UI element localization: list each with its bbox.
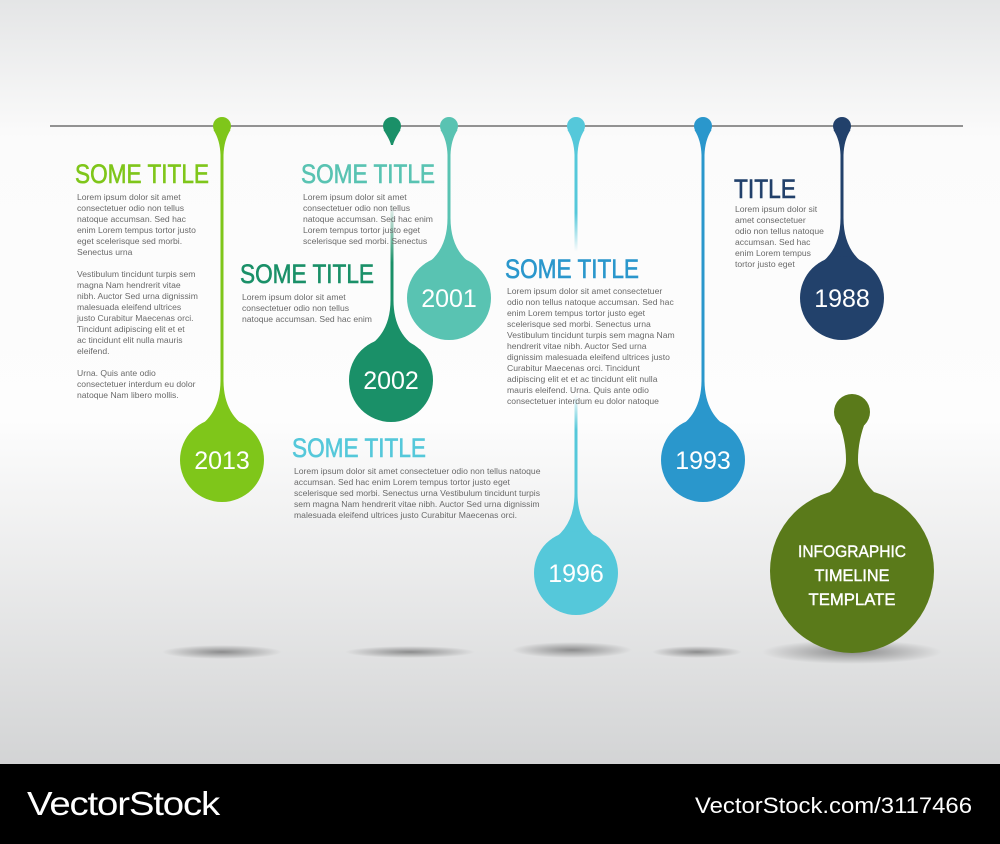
text block: 2001: Lorem tempus tortor justo eget — [303, 225, 421, 235]
shadows — [162, 640, 942, 664]
text block: 2001: SOME TITLE — [301, 159, 435, 189]
main badge: infographic timeline template: TIMELINE — [814, 566, 890, 585]
pin: 1988 — [800, 117, 884, 340]
text block: 1996: scelerisque sed morbi. Senectus urna Vestibulum tincidunt turpis — [294, 488, 540, 498]
footer bar: VectorStock.com/3117466 — [695, 793, 972, 818]
text block: 1993: Curabitur Maecenas orci. Tincidunt — [507, 363, 640, 373]
pin: 2001 — [407, 117, 491, 340]
text block: 2013: Tincidunt adipiscing elit et et — [77, 324, 185, 334]
text block: 2013: justo Curabitur Maecenas orci. — [76, 313, 194, 323]
text block: 1993 — [505, 254, 675, 406]
footer bar — [0, 764, 1000, 844]
text block: 1988: enim Lorem tempus — [735, 248, 811, 258]
text block: 1988: tortor justo eget — [735, 259, 795, 269]
text block: 1993: SOME TITLE — [505, 254, 639, 284]
text block: 1988: odio non tellus natoque — [735, 226, 824, 236]
text block: 2001 — [301, 159, 435, 246]
text block: 1993: dignissim malesuada eleifend ultrices justo — [507, 352, 670, 362]
text block: 2013: Vestibulum tincidunt turpis sem — [77, 269, 195, 279]
text block: 2001: consectetuer odio non tellus — [303, 203, 410, 213]
main badge: infographic timeline template: TEMPLATE — [808, 590, 896, 609]
text block: 1988: Lorem ipsum dolor sit — [735, 204, 818, 214]
text block: 2013: natoque accumsan. Sed hac — [77, 214, 187, 224]
text block: 2013 — [75, 159, 209, 400]
text block: 2002 — [240, 259, 374, 324]
text block: 1993: mauris eleifend. Urna. Quis ante odio — [507, 385, 649, 395]
year 1993: 1993 — [675, 447, 731, 475]
pin: 2013 — [180, 117, 264, 502]
text block: 2002: Lorem ipsum dolor sit amet — [242, 292, 346, 302]
text block: 1988 — [734, 174, 824, 269]
text block: 1996: malesuada eleifend ultrices justo Curabitur Maecenas orci. — [294, 510, 517, 520]
text block: 1996: sem magna Nam hendrerit vitae nibh. Auctor Sed urna dignissim — [294, 499, 540, 509]
text block: 2013: enim Lorem tempus tortor justo — [77, 225, 196, 235]
text block: 1993: adipiscing elit et et ac tincidunt elit nulla — [507, 374, 658, 384]
year 2002: 2002 — [363, 367, 419, 395]
text block: 2013: Lorem ipsum dolor sit amet — [77, 192, 181, 202]
text block: 2013: ac tincidunt elit nulla mauris — [77, 335, 183, 345]
pin: 1996 — [534, 117, 618, 615]
pin: 1993 — [661, 117, 745, 502]
main badge: infographic timeline template: INFOGRAPHIC — [798, 542, 906, 561]
text block: 1993: Vestibulum tincidunt turpis sem magna Nam — [507, 330, 675, 340]
text block: 1993: scelerisque sed morbi. Senectus urna — [507, 319, 651, 329]
year 1996: 1996 — [548, 560, 604, 588]
text block: 2013: nibh. Auctor Sed urna dignissim — [77, 291, 198, 301]
text block: 1993: odio non tellus natoque accumsan. Sed hac — [507, 297, 674, 307]
text block: 2013: SOME TITLE — [75, 159, 209, 189]
pin: 2002 — [349, 117, 433, 422]
text block: 1988: TITLE — [734, 174, 796, 204]
text block: 2013: eget scelerisque sed morbi. — [77, 236, 182, 246]
text block: 1993: consectetuer interdum eu dolor natoque — [507, 396, 659, 406]
text block: 1996 — [292, 433, 541, 520]
text block: 1988: amet consectetuer — [735, 215, 806, 225]
text block: 1993: enim Lorem tempus tortor justo eget — [507, 308, 646, 318]
text block: 2013: natoque Nam libero mollis. — [77, 390, 179, 400]
text block: 1996: accumsan. Sed hac enim Lorem tempus tortor justo eget — [294, 477, 511, 487]
text block: 2013: eleifend. — [77, 346, 110, 356]
text block: 2001: natoque accumsan. Sed hac enim — [303, 214, 433, 224]
text block: 1993: Lorem ipsum dolor sit amet consectetuer — [507, 286, 662, 296]
timeline axis — [50, 125, 963, 127]
text block: 1993: hendrerit vitae nibh. Auctor Sed urna — [507, 341, 647, 351]
text block: 2013: magna Nam hendrerit vitae — [77, 280, 181, 290]
main badge: infographic timeline template — [770, 394, 934, 653]
text block: 1988: accumsan. Sed hac — [735, 237, 811, 247]
year 2001: 2001 — [421, 285, 477, 313]
text block: 2002: SOME TITLE — [240, 259, 374, 289]
year 2013: 2013 — [194, 447, 250, 475]
text block: 2013: Urna. Quis ante odio — [77, 368, 156, 378]
text block: 2013: Senectus urna — [77, 247, 133, 257]
year 1988: 1988 — [814, 285, 870, 313]
text block: 2013: consectetuer interdum eu dolor — [77, 379, 196, 389]
text block: 2002: consectetuer odio non tellus — [242, 303, 349, 313]
text block: 2001: Lorem ipsum dolor sit amet — [303, 192, 407, 202]
text block: 2013: consectetuer odio non tellus — [77, 203, 184, 213]
text block: 2001: scelerisque sed morbi. Senectus — [303, 236, 427, 246]
text block: 1996: SOME TITLE — [292, 433, 426, 463]
text block: 2002: natoque accumsan. Sed hac enim — [242, 314, 372, 324]
text block: 2013: malesuada eleifend ultrices — [77, 302, 181, 312]
text block: 1996: Lorem ipsum dolor sit amet consectetuer odio non tellus natoque — [294, 466, 541, 476]
footer bar: VectorStock — [27, 785, 221, 822]
